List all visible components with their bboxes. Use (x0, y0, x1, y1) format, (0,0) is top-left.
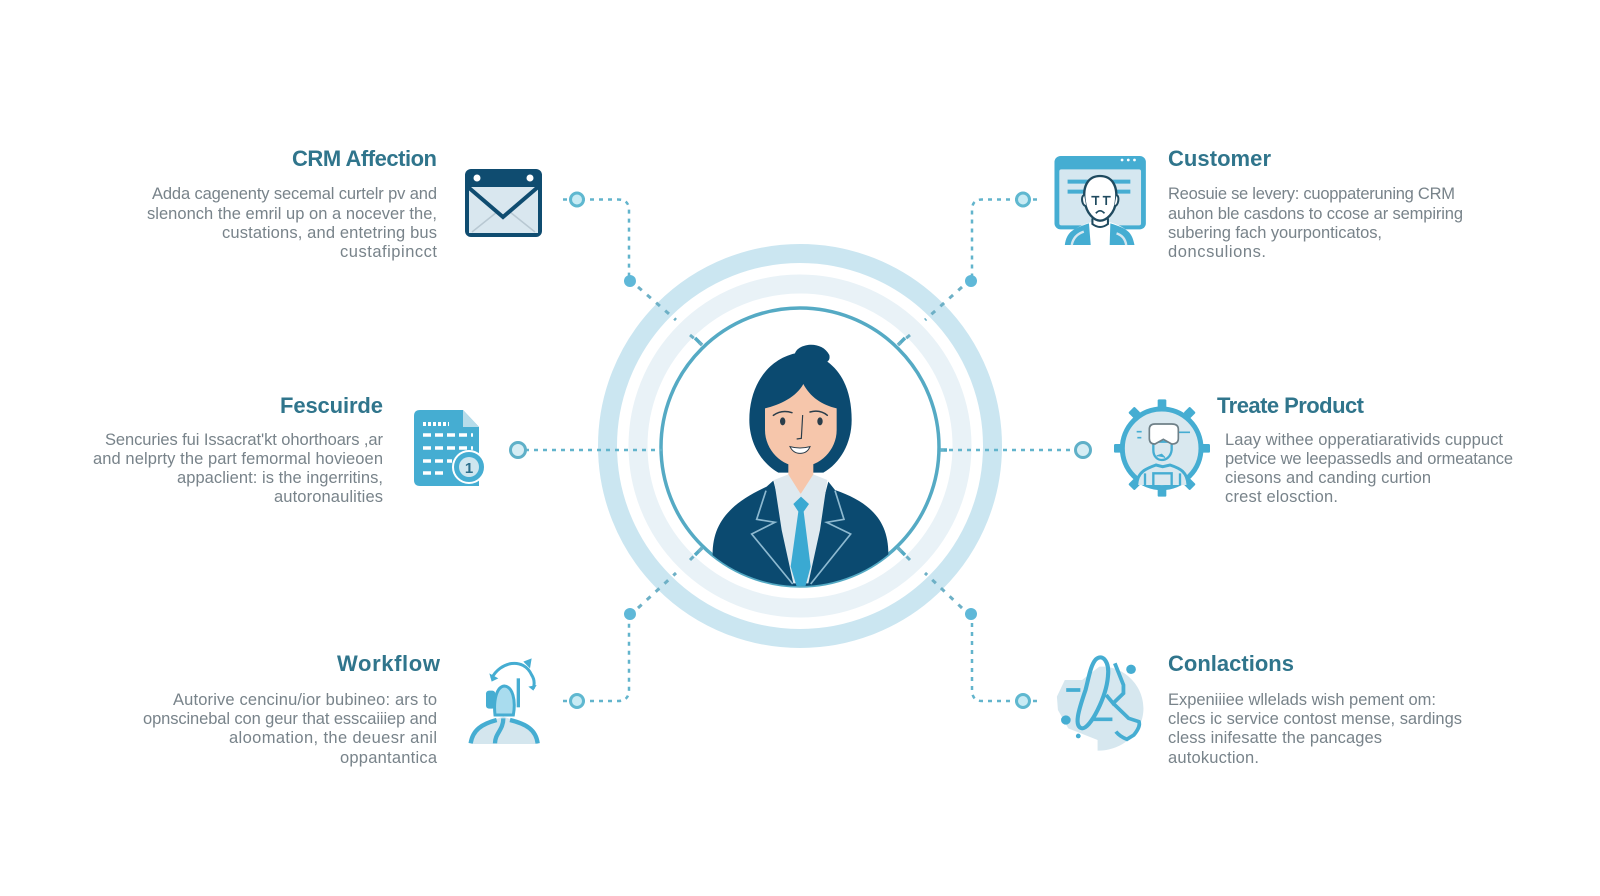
icon: calendar document (414, 410, 485, 486)
panel: Workflow (143, 651, 538, 767)
icon: hand gesture (1057, 657, 1143, 751)
portrait: businesswoman (713, 345, 888, 590)
panel: Customer (1054, 146, 1463, 261)
text block (1168, 185, 1463, 261)
connectors (510, 193, 1090, 708)
text block (1225, 431, 1513, 506)
tie (791, 497, 811, 587)
icon: calendar document: 1 (465, 460, 473, 477)
connector: middle right (940, 442, 1090, 458)
hair (749, 345, 852, 473)
text block: appaclient: is the ingerritins, (177, 469, 383, 487)
text block: Reosuie se levery: cuoppateruning CRM (1168, 185, 1455, 203)
heading: Treate Product (1217, 393, 1365, 418)
text block: Autorive cencinu/ior bubineo: ars to (173, 691, 437, 709)
text block: Laay withee opperatiarativids cuppuct (1225, 431, 1503, 449)
heading: Conlactions (1168, 651, 1294, 676)
text block (93, 431, 384, 506)
text block: cless inifesatte the pancages (1168, 729, 1382, 747)
text block: clecs ic service contost mense, sardings (1168, 710, 1462, 728)
panel: Fescuirde (93, 393, 485, 506)
face (765, 384, 837, 467)
panel: Treate Product (1114, 393, 1513, 506)
connector: top left (563, 193, 702, 345)
jacket (713, 481, 888, 590)
text block: crest elosction. (1225, 488, 1338, 506)
text block: auhon ble casdons to ccose ar sempiring (1168, 205, 1463, 223)
text block: petvice we leepassedls and ormeatance (1225, 450, 1513, 468)
text block: ciesons and canding curtion (1225, 469, 1431, 487)
text block: oppantantica (340, 749, 438, 767)
inner ring (661, 308, 939, 586)
text block: doncsulions. (1168, 243, 1266, 261)
text block: aloomation, the deuesr anil (229, 729, 437, 747)
icon: headset person (471, 658, 538, 744)
text block: custations, and entetring bus (222, 224, 437, 242)
connector: bottom left (563, 548, 702, 708)
heading: Workflow (337, 651, 441, 676)
text block (1168, 691, 1462, 767)
central rings and portrait (608, 254, 992, 638)
outer ring (608, 254, 992, 638)
text block (143, 691, 438, 767)
connector: bottom right (898, 548, 1037, 708)
connector: top right (898, 193, 1037, 345)
text block: Adda cagenenty secemal curtelr pv and (152, 185, 437, 203)
neck (788, 464, 814, 494)
connector: middle left (510, 442, 662, 458)
icon: customer profile window (1054, 156, 1146, 245)
lapels (752, 491, 851, 584)
panel: CRM Affection (147, 146, 542, 261)
ring ticks (695, 338, 947, 555)
text block: custafipincct (340, 243, 437, 261)
heading: Fescuirde (280, 393, 383, 418)
text block: Expeniiiee wllelads wish pement om: (1168, 691, 1436, 709)
heading: Customer (1168, 146, 1271, 171)
facial features (773, 411, 827, 453)
text block: opnscinebal con geur that esscaiiiep and (143, 710, 437, 728)
text block: autoronaulities (274, 488, 383, 506)
text block: slenonch the emril up on a nocever the, (147, 205, 437, 223)
icon: gear with person (1114, 399, 1210, 497)
text block (147, 185, 437, 261)
heading: CRM Affection (292, 146, 437, 171)
panel: Conlactions (1057, 651, 1462, 767)
icon: envelope (465, 169, 542, 237)
shirt (774, 474, 827, 583)
text block: and nelprty the part femormal hovieoen (93, 450, 383, 468)
text block: Sencuries fui Issacrat'kt ohorthoars ,ar (105, 431, 384, 449)
text block: autokuction. (1168, 749, 1259, 767)
middle ring (638, 284, 962, 608)
text block: subering fach yourponticatos, (1168, 224, 1382, 242)
